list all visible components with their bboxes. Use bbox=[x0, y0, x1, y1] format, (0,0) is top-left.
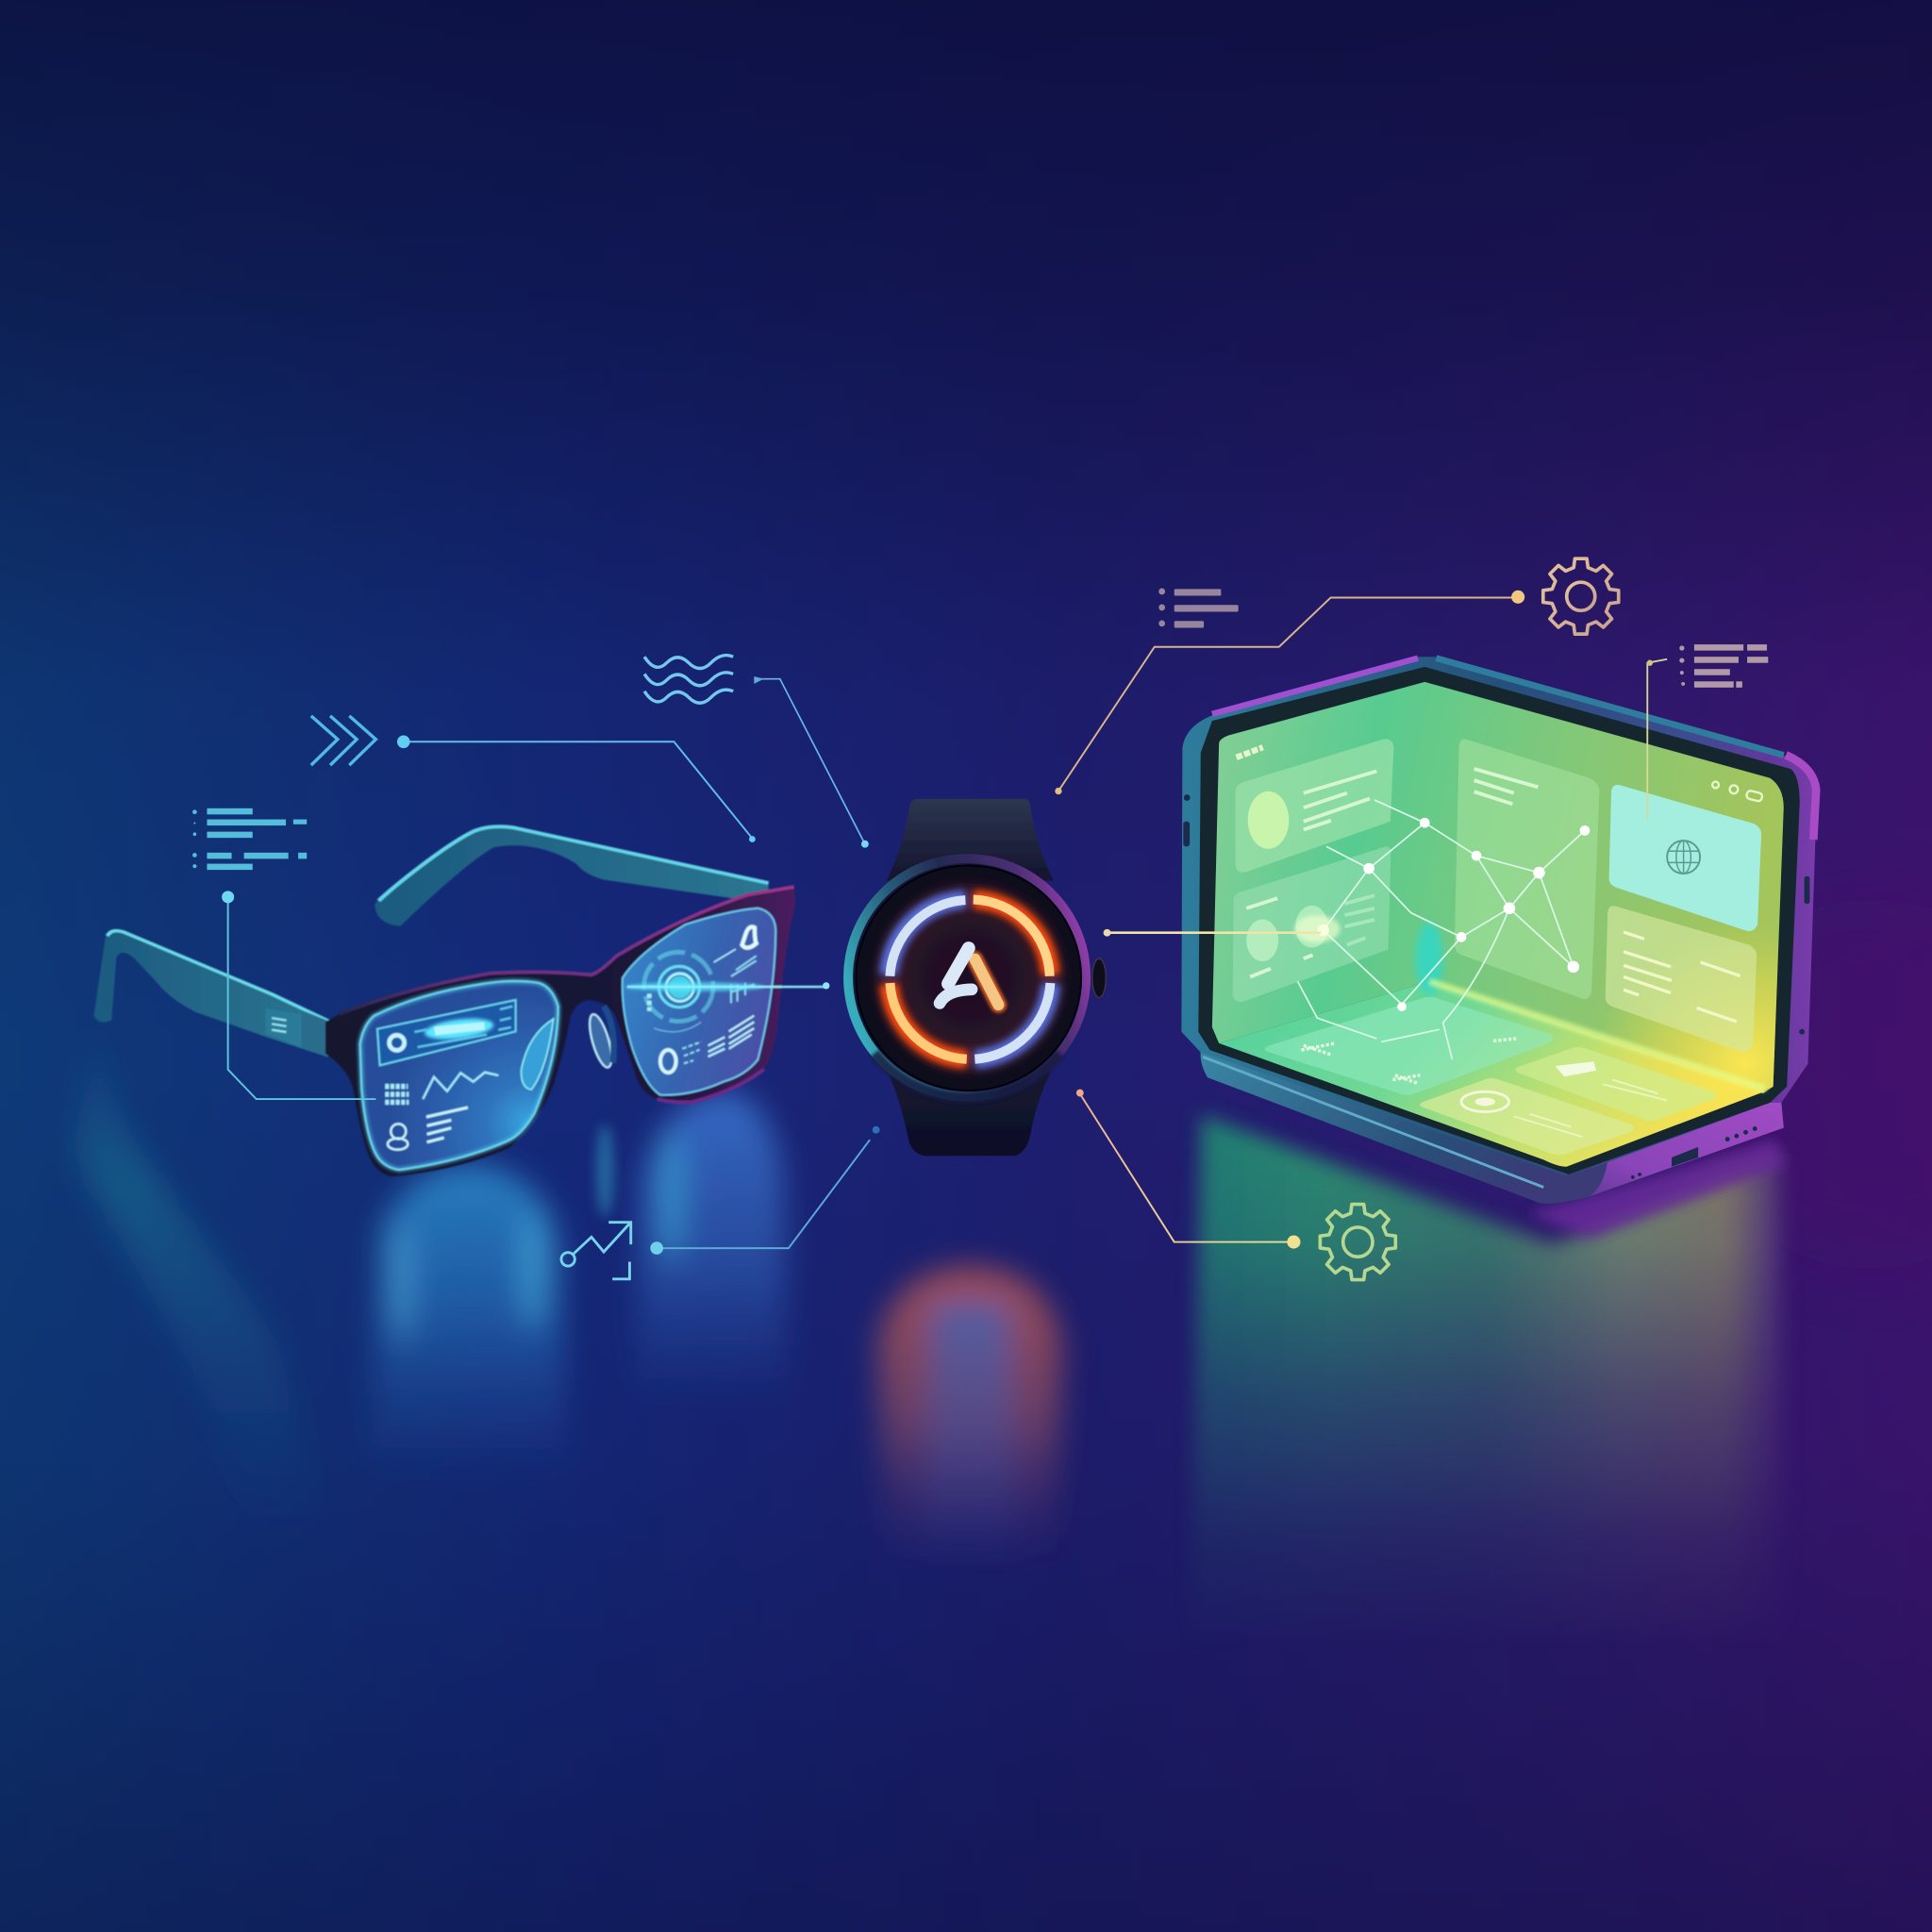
crown bbox=[1092, 958, 1106, 997]
list bars: top right bbox=[1679, 644, 1768, 688]
fold glow bbox=[1387, 684, 1472, 981]
connector: top right list to screen bbox=[1647, 659, 1667, 820]
screen panel: profile bbox=[1236, 739, 1393, 873]
HUD card bbox=[377, 1000, 516, 1065]
icon: gear bottom bbox=[1320, 1205, 1395, 1280]
floor reflections bbox=[74, 1035, 1787, 1675]
screen panel: globe card bbox=[1609, 785, 1761, 931]
connector: list to left lens bbox=[222, 891, 375, 1099]
list bars: top centre bbox=[1158, 589, 1239, 627]
right lens with HUD bbox=[623, 908, 775, 1095]
person icon bbox=[388, 1124, 408, 1150]
watch face bbox=[856, 865, 1081, 1091]
connector: trend icon to watch bbox=[650, 1126, 880, 1255]
ring glow bbox=[889, 899, 1051, 1059]
icon: trend arrow bbox=[561, 1223, 631, 1279]
hinge block bbox=[302, 1010, 328, 1058]
reflection: left lens bbox=[370, 1164, 569, 1478]
screen panel: text card bbox=[1606, 906, 1757, 1053]
bottom left rim bbox=[1201, 1053, 1610, 1204]
top edge highlights bbox=[1212, 658, 1418, 714]
connector: gold line to gear bbox=[1055, 591, 1524, 794]
icon: chevrons bbox=[311, 716, 375, 765]
target rings bbox=[644, 952, 713, 1022]
foldable phone bbox=[1181, 655, 1821, 1204]
phone body bbox=[1181, 657, 1817, 1204]
reflection: watch bbox=[877, 1267, 1062, 1565]
screen panel: media bbox=[1233, 846, 1391, 1002]
status icons bbox=[1237, 747, 1763, 802]
floor panel cards bbox=[1265, 997, 1716, 1155]
bottom right rim bbox=[1571, 1103, 1784, 1196]
lower strap bbox=[889, 1073, 1050, 1156]
network graph bbox=[1298, 800, 1585, 1059]
bezel bbox=[848, 858, 1086, 1096]
watch bbox=[848, 799, 1106, 1156]
nose pad bbox=[585, 1007, 616, 1070]
list bars: upper left bbox=[192, 808, 307, 870]
icon: waves bbox=[644, 656, 733, 703]
reflection: glasses temple streak bbox=[74, 1035, 326, 1528]
screen wall bbox=[1212, 682, 1784, 1093]
connector: chevrons to glasses arm bbox=[397, 735, 756, 842]
yellow corner glow bbox=[1611, 938, 1779, 1092]
upper strap bbox=[887, 799, 1054, 880]
side buttons and ports bbox=[1183, 794, 1809, 1179]
black bezel bbox=[1198, 667, 1800, 1174]
glasses bbox=[93, 826, 827, 1176]
frame bbox=[325, 887, 795, 1176]
connector: lens to watch bbox=[823, 982, 829, 990]
screen floor bbox=[1219, 981, 1765, 1167]
connector: waves to watch bbox=[754, 676, 869, 848]
near temple arm bbox=[93, 931, 328, 1058]
ear-drop icon bbox=[522, 1019, 554, 1090]
connector: watch to lower gear bbox=[1076, 1090, 1300, 1249]
lens glow beam bbox=[625, 982, 827, 991]
reflection: right lens bbox=[635, 1091, 789, 1405]
connectors and satellite icons bbox=[192, 558, 1768, 1280]
icon: gear top bbox=[1543, 558, 1619, 634]
connector: watch to phone screen bbox=[1104, 929, 1321, 937]
left lens with HUD bbox=[360, 981, 558, 1170]
far temple arm bbox=[375, 826, 769, 926]
ring segments bbox=[890, 899, 1050, 1059]
screen panel: list bbox=[1455, 739, 1599, 999]
reflection: phone bbox=[1187, 1108, 1789, 1581]
pulse line bbox=[423, 1073, 498, 1099]
logo A bbox=[940, 948, 998, 1005]
